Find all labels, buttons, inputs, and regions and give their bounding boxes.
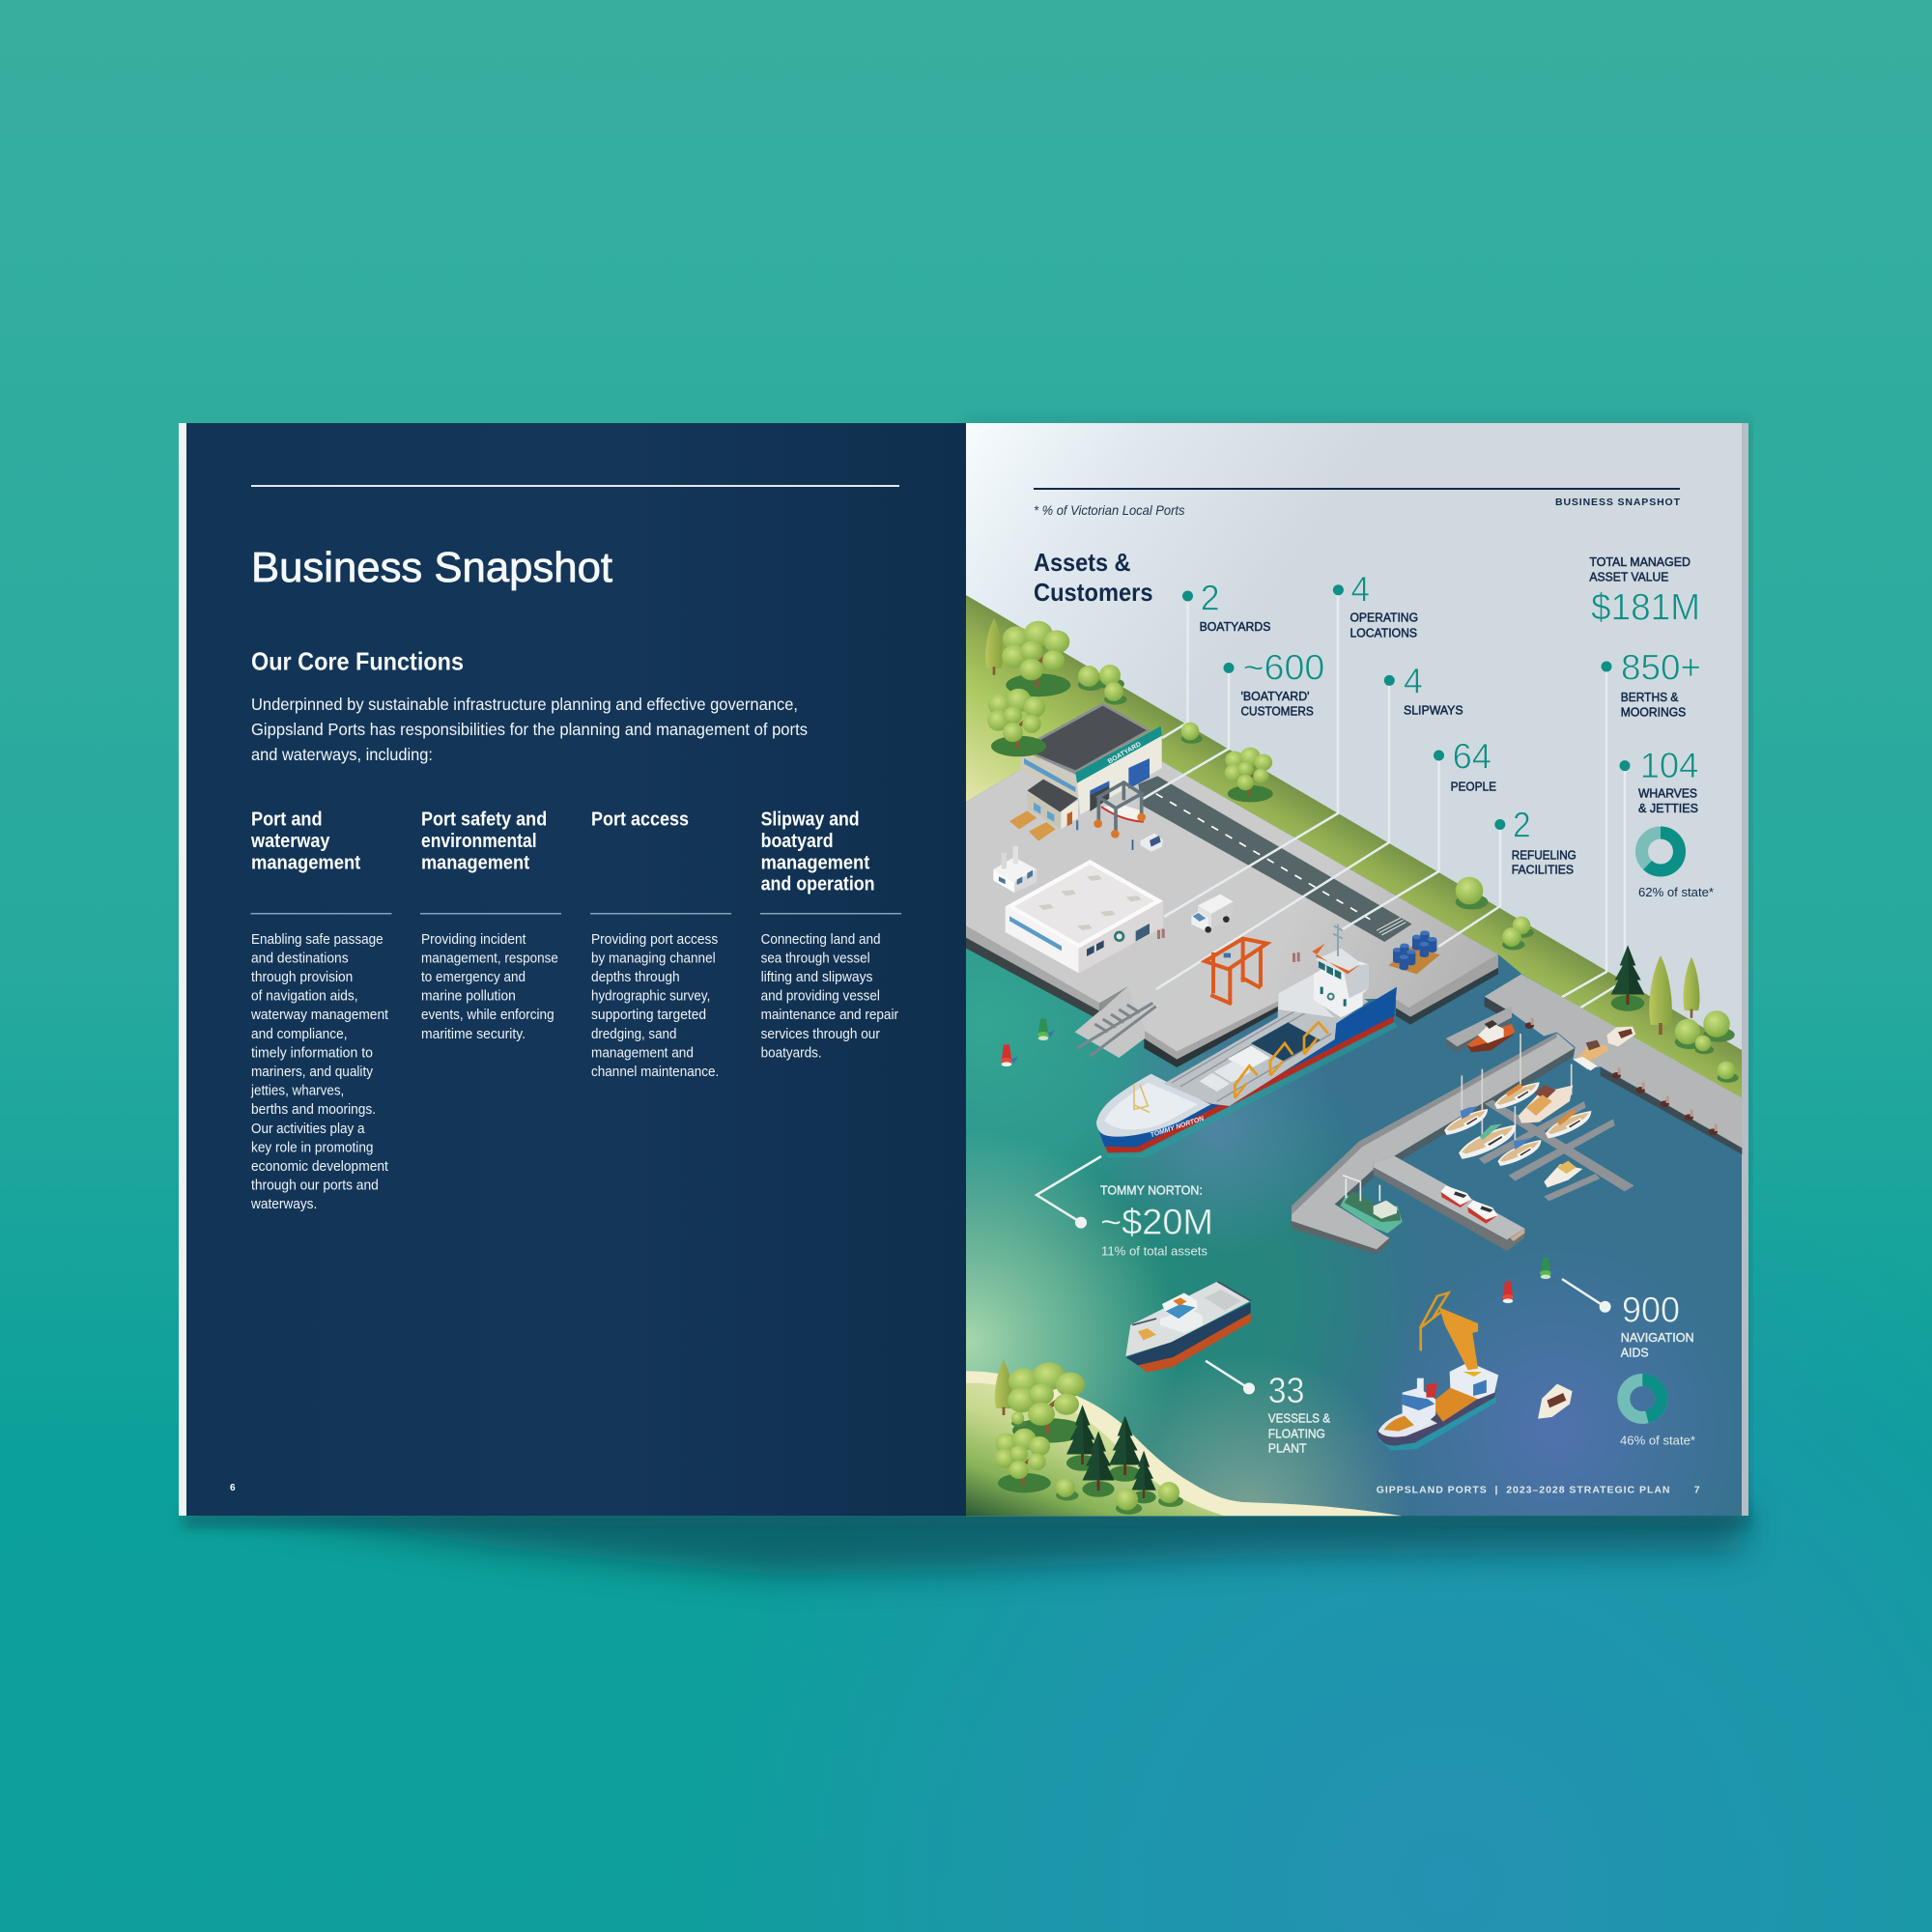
parked vehicles on quay bbox=[1573, 1027, 1635, 1070]
column: port safety: maritime security. bbox=[421, 1027, 526, 1042]
stat: wharves and jetties: & JETTIES bbox=[1638, 801, 1698, 815]
column: port safety: Port safety and bbox=[421, 810, 547, 831]
footnote rule and header bbox=[1034, 488, 1681, 518]
stat: refueling facilities bbox=[1494, 806, 1577, 877]
column: port access: Providing port access bbox=[591, 932, 718, 948]
road bbox=[1138, 776, 1412, 942]
callout: Tommy Norton value: TOMMY NORTON: bbox=[1100, 1182, 1203, 1198]
section heading: assets and customers: Customers bbox=[1034, 578, 1153, 607]
column: port access: by managing channel bbox=[591, 951, 716, 966]
column: port access: hydrographic survey, bbox=[591, 989, 710, 1005]
column: slipway and boatyard: Connecting land and bbox=[761, 932, 881, 948]
white motor boats bbox=[1441, 1185, 1498, 1224]
donut: 62% of state: 62% of state* bbox=[1638, 885, 1714, 899]
stat: people: 64 bbox=[1453, 736, 1492, 776]
stat: boatyards: BOATYARDS bbox=[1200, 619, 1271, 634]
truck bbox=[1191, 895, 1234, 933]
donut: 62% of state bbox=[1638, 833, 1714, 899]
travel lift with boat bbox=[1094, 782, 1146, 838]
page shadow bbox=[184, 417, 1752, 1575]
bridge bbox=[1278, 973, 1335, 1017]
callout: navigation aids bbox=[1562, 1279, 1694, 1360]
column: port and waterway management: waterway management bbox=[250, 1008, 388, 1023]
column: port and waterway management: Enabling safe passage bbox=[251, 932, 384, 948]
column: port and waterway management: mariners, and quality bbox=[251, 1065, 374, 1080]
footnote: * % of Victorian Local Ports bbox=[1034, 502, 1184, 518]
stat: total managed asset value: TOTAL MANAGED bbox=[1589, 554, 1690, 569]
subheading: Our Core Functions bbox=[251, 647, 464, 676]
marina bbox=[1292, 974, 1742, 1254]
intro paragraph: Underpinned by sustainable infrastructure planning and effective governance, bbox=[251, 695, 798, 714]
water bbox=[966, 724, 1742, 1516]
column: port access: management and bbox=[591, 1045, 694, 1061]
marina boats bbox=[1444, 1034, 1591, 1187]
column: port safety: management, response bbox=[421, 951, 558, 966]
fishing boat bbox=[1340, 1176, 1403, 1234]
intro paragraph: and waterways, including: bbox=[251, 745, 433, 764]
blue barrels bbox=[1388, 930, 1440, 974]
substation bbox=[993, 846, 1037, 893]
quay and jetties bbox=[1292, 974, 1742, 1254]
boatyard shed bbox=[1019, 702, 1162, 829]
column: port safety: Providing incident bbox=[421, 932, 526, 948]
stat: boatyard customers: ~600 bbox=[1243, 648, 1324, 688]
stat: boatyard customers bbox=[1223, 648, 1324, 718]
stat: total managed asset value bbox=[1589, 554, 1700, 628]
callout: Tommy Norton value: 11% of total assets bbox=[1101, 1244, 1208, 1259]
column: port and waterway management: of navigation aids, bbox=[251, 989, 358, 1005]
column: port safety: marine pollution bbox=[421, 989, 516, 1005]
column: slipway and boatyard: boatyard bbox=[761, 831, 834, 852]
column: port safety: events, while enforcing bbox=[421, 1008, 554, 1023]
land strip bbox=[966, 595, 1742, 1100]
column: port and waterway management: management bbox=[251, 852, 361, 873]
stat: total managed asset value: ASSET VALUE bbox=[1589, 570, 1669, 584]
quay side faces bbox=[966, 927, 1099, 1017]
column: port and waterway management: jetties, wharves, bbox=[250, 1084, 344, 1099]
quay pad bbox=[966, 724, 1498, 1067]
column: slipway and boatyard: and operation bbox=[761, 874, 875, 895]
column: port access: dredging, sand bbox=[591, 1027, 676, 1042]
callout: vessels and floating plant: FLOATING bbox=[1268, 1426, 1325, 1440]
small cruiser bbox=[1538, 1383, 1573, 1419]
workers bbox=[1293, 952, 1300, 962]
trees on the land strip bbox=[985, 618, 1739, 1083]
intro paragraph bbox=[251, 695, 808, 764]
tug boat bbox=[1466, 1020, 1515, 1052]
stat: people: PEOPLE bbox=[1451, 779, 1496, 793]
footer: 7 bbox=[1694, 1484, 1700, 1495]
stat: wharves and jetties: WHARVES bbox=[1638, 785, 1697, 800]
column: slipway and boatyard: Slipway and bbox=[761, 810, 860, 831]
stat: operating locations: OPERATING bbox=[1350, 611, 1418, 624]
column: port and waterway management: timely information to bbox=[251, 1045, 373, 1061]
buoys bbox=[1001, 1018, 1557, 1303]
column: port and waterway management: waterways. bbox=[250, 1197, 317, 1212]
stat: total managed asset value: $181M bbox=[1591, 587, 1700, 628]
bollards bbox=[1525, 1018, 1718, 1135]
warehouse bbox=[1006, 860, 1165, 973]
stat: boatyards bbox=[1182, 579, 1271, 634]
column: port safety: management bbox=[421, 852, 530, 873]
boatyard shed: BOATYARD bbox=[1107, 741, 1143, 765]
quay surface bbox=[966, 724, 1498, 1051]
crane ship bbox=[1377, 1293, 1498, 1451]
intro paragraph: Gippsland Ports has responsibilities for the planning and management of ports bbox=[251, 720, 808, 739]
stat: berths and moorings: BERTHS & bbox=[1621, 690, 1679, 704]
column: port and waterway management: and compliance, bbox=[251, 1027, 348, 1042]
stat: berths and moorings bbox=[1602, 648, 1701, 720]
column: port and waterway management: through provision bbox=[251, 970, 353, 985]
stat: operating locations bbox=[1333, 570, 1418, 639]
callout: navigation aids: NAVIGATION bbox=[1621, 1330, 1694, 1345]
column: port and waterway management: Our activities play a bbox=[251, 1122, 365, 1137]
column: port safety: environmental bbox=[421, 831, 537, 852]
stat: people bbox=[1434, 736, 1496, 793]
stat: wharves and jetties bbox=[1619, 746, 1698, 815]
column: port and waterway management: economic development bbox=[251, 1159, 388, 1175]
column: port and waterway management: berths and moorings. bbox=[251, 1102, 376, 1118]
stat: slipways: 4 bbox=[1404, 661, 1423, 701]
column: slipway and boatyard: maintenance and repair bbox=[761, 1008, 898, 1023]
donut: 46% of state: 46% of state* bbox=[1620, 1434, 1695, 1448]
orange gantry crane bbox=[1205, 939, 1267, 1004]
column: port and waterway management: through our ports and bbox=[251, 1179, 379, 1194]
stat: refueling facilities: 2 bbox=[1513, 806, 1531, 844]
stat: refueling facilities: REFUELING bbox=[1512, 848, 1577, 862]
column: slipway and boatyard: lifting and slipways bbox=[761, 970, 873, 985]
stat: wharves and jetties: 104 bbox=[1640, 746, 1698, 785]
ship: Tommy Norton: TOMMY NORTON bbox=[1150, 1115, 1206, 1139]
donut: 46% of state bbox=[1620, 1379, 1695, 1448]
slipway ramp bbox=[1075, 987, 1145, 1058]
ship: Tommy Norton bbox=[1096, 924, 1398, 1157]
column: port access: Port access bbox=[591, 810, 689, 831]
column: port and waterway management: Port and bbox=[251, 810, 323, 831]
stat: boatyards: 2 bbox=[1201, 579, 1219, 618]
column: port and waterway management: and destinations bbox=[251, 951, 349, 966]
stat: berths and moorings: MOORINGS bbox=[1621, 705, 1687, 720]
column: slipway and boatyard: sea through vessel bbox=[761, 951, 870, 966]
section heading: assets and customers bbox=[1034, 548, 1153, 607]
right page background bbox=[966, 423, 1748, 1516]
column: port access bbox=[590, 810, 731, 1080]
footer: GIPPSLAND PORTS | 2023–2028 STRATEGIC PLAN bbox=[1377, 1484, 1669, 1495]
callout: Tommy Norton value: ~$20M bbox=[1100, 1202, 1213, 1242]
island with trees bbox=[966, 1371, 1403, 1516]
column: port safety bbox=[420, 810, 561, 1042]
section heading: assets and customers: Assets & bbox=[1034, 548, 1130, 577]
column: slipway and boatyard: and providing vessel bbox=[761, 989, 880, 1005]
callout: navigation aids: 900 bbox=[1622, 1291, 1680, 1329]
callout: vessels and floating plant: VESSELS & bbox=[1268, 1411, 1330, 1426]
column: port access: depths through bbox=[591, 970, 680, 985]
stat: slipways bbox=[1384, 661, 1463, 718]
left page bbox=[179, 423, 966, 1516]
callout: vessels and floating plant: PLANT bbox=[1268, 1441, 1307, 1456]
stat: boatyard customers: 'BOATYARD' bbox=[1240, 689, 1310, 703]
stat: boatyard customers: CUSTOMERS bbox=[1240, 703, 1314, 718]
callout: Tommy Norton value bbox=[1037, 1156, 1213, 1259]
stat: operating locations: 4 bbox=[1350, 570, 1370, 610]
page heading: Business Snapshot bbox=[251, 544, 612, 591]
trees on the island bbox=[994, 1360, 1183, 1515]
column: slipway and boatyard bbox=[760, 810, 901, 1061]
callout: vessels and floating plant: 33 bbox=[1268, 1371, 1304, 1410]
page number 6: 6 bbox=[230, 1483, 236, 1493]
callout: navigation aids: AIDS bbox=[1621, 1345, 1649, 1360]
small sweeper vehicle bbox=[1076, 820, 1163, 852]
stat: slipways: SLIPWAYS bbox=[1404, 703, 1463, 718]
column: port access: supporting targeted bbox=[591, 1008, 706, 1023]
column: slipway and boatyard: services through our bbox=[761, 1027, 880, 1042]
stat: operating locations: LOCATIONS bbox=[1350, 625, 1417, 639]
stat: berths and moorings: 850+ bbox=[1621, 648, 1701, 688]
column: slipway and boatyard: boatyards. bbox=[761, 1045, 822, 1061]
yellow deck cranes bbox=[1133, 1022, 1328, 1113]
port buildings and vehicles bbox=[993, 702, 1440, 1004]
callout: vessels and floating plant bbox=[1206, 1361, 1330, 1456]
column: port and waterway management: waterway bbox=[250, 831, 330, 852]
column: port and waterway management: key role in promoting bbox=[251, 1140, 373, 1155]
timber pallets bbox=[1009, 810, 1056, 841]
column: port and waterway management bbox=[250, 810, 392, 1212]
running header: BUSINESS SNAPSHOT bbox=[1555, 497, 1681, 508]
column: slipway and boatyard: management bbox=[761, 852, 870, 873]
stat: refueling facilities: FACILITIES bbox=[1512, 862, 1574, 877]
column: port access: channel maintenance. bbox=[591, 1065, 719, 1080]
pontoons bbox=[1479, 1099, 1634, 1201]
barge vessel bbox=[1125, 1282, 1251, 1373]
column: port safety: to emergency and bbox=[421, 970, 526, 985]
leader lines bbox=[1143, 590, 1625, 1014]
